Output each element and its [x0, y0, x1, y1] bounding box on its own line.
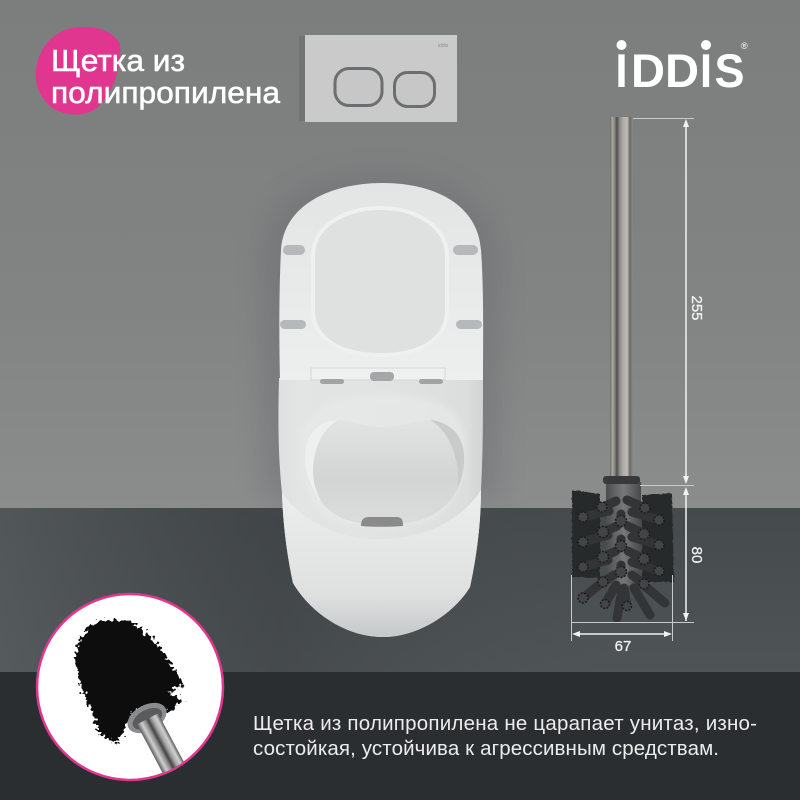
lid bumpers — [280, 245, 482, 329]
caption text: состойкая, устойчива к агрессивным средствам. — [253, 737, 719, 760]
tuft end caps — [578, 502, 664, 610]
logo: iDDIS: D — [631, 44, 665, 97]
seat lid — [279, 183, 483, 380]
close-up collar and rod — [128, 702, 184, 773]
bowl opening — [305, 420, 464, 525]
logo: iDDIS: D — [665, 44, 699, 97]
hinge button — [370, 372, 394, 381]
inset circle: brush close-up — [37, 594, 223, 800]
logo: iDDIS: I — [700, 44, 712, 97]
pink blob — [36, 27, 120, 115]
bowl body — [278, 378, 483, 637]
close-up bristles — [75, 620, 184, 743]
logo: iDDIS: I — [616, 44, 628, 97]
toilet — [278, 183, 483, 637]
bowl drain — [361, 517, 403, 527]
toilet brush with dimensions — [572, 117, 705, 655]
brush rod — [610, 117, 633, 479]
small flush button — [394, 72, 434, 106]
bowl front face — [282, 490, 481, 637]
title — [51, 43, 281, 110]
background: floor — [0, 508, 800, 673]
bristles back block — [572, 490, 674, 582]
flush plate — [299, 35, 457, 122]
dimension label: 80: 80 — [688, 547, 705, 563]
dimension lines — [572, 118, 694, 641]
logo: iDDIS — [616, 40, 748, 97]
caption text — [253, 712, 757, 760]
title: Щетка из — [51, 43, 185, 78]
lid inner recess — [313, 208, 447, 355]
title: полипропилена — [51, 75, 281, 110]
bowl rim hump — [301, 395, 466, 527]
background: wall — [0, 0, 800, 509]
hinge feet — [320, 379, 443, 384]
flush plate brand mark: iddis — [438, 43, 449, 49]
caption text: Щетка из полипропилена не царапает унитаз, изно- — [253, 712, 757, 735]
dimension label: 255: 255 — [688, 295, 705, 321]
dimension arrows — [572, 119, 689, 637]
brush body — [606, 482, 641, 588]
large flush button — [335, 68, 382, 106]
seat hinge bar — [311, 368, 445, 380]
dimension label: 67: 67 — [615, 638, 631, 655]
brush collar — [603, 476, 640, 484]
wall shadow behind toilet — [262, 175, 500, 500]
bristle tufts — [583, 500, 665, 618]
bowl inner right wash — [430, 420, 464, 487]
logo: iDDIS: S — [714, 44, 744, 97]
logo: iDDIS: ® — [741, 41, 748, 51]
bowl inner left wash — [305, 420, 338, 505]
bottom caption band — [0, 672, 800, 800]
